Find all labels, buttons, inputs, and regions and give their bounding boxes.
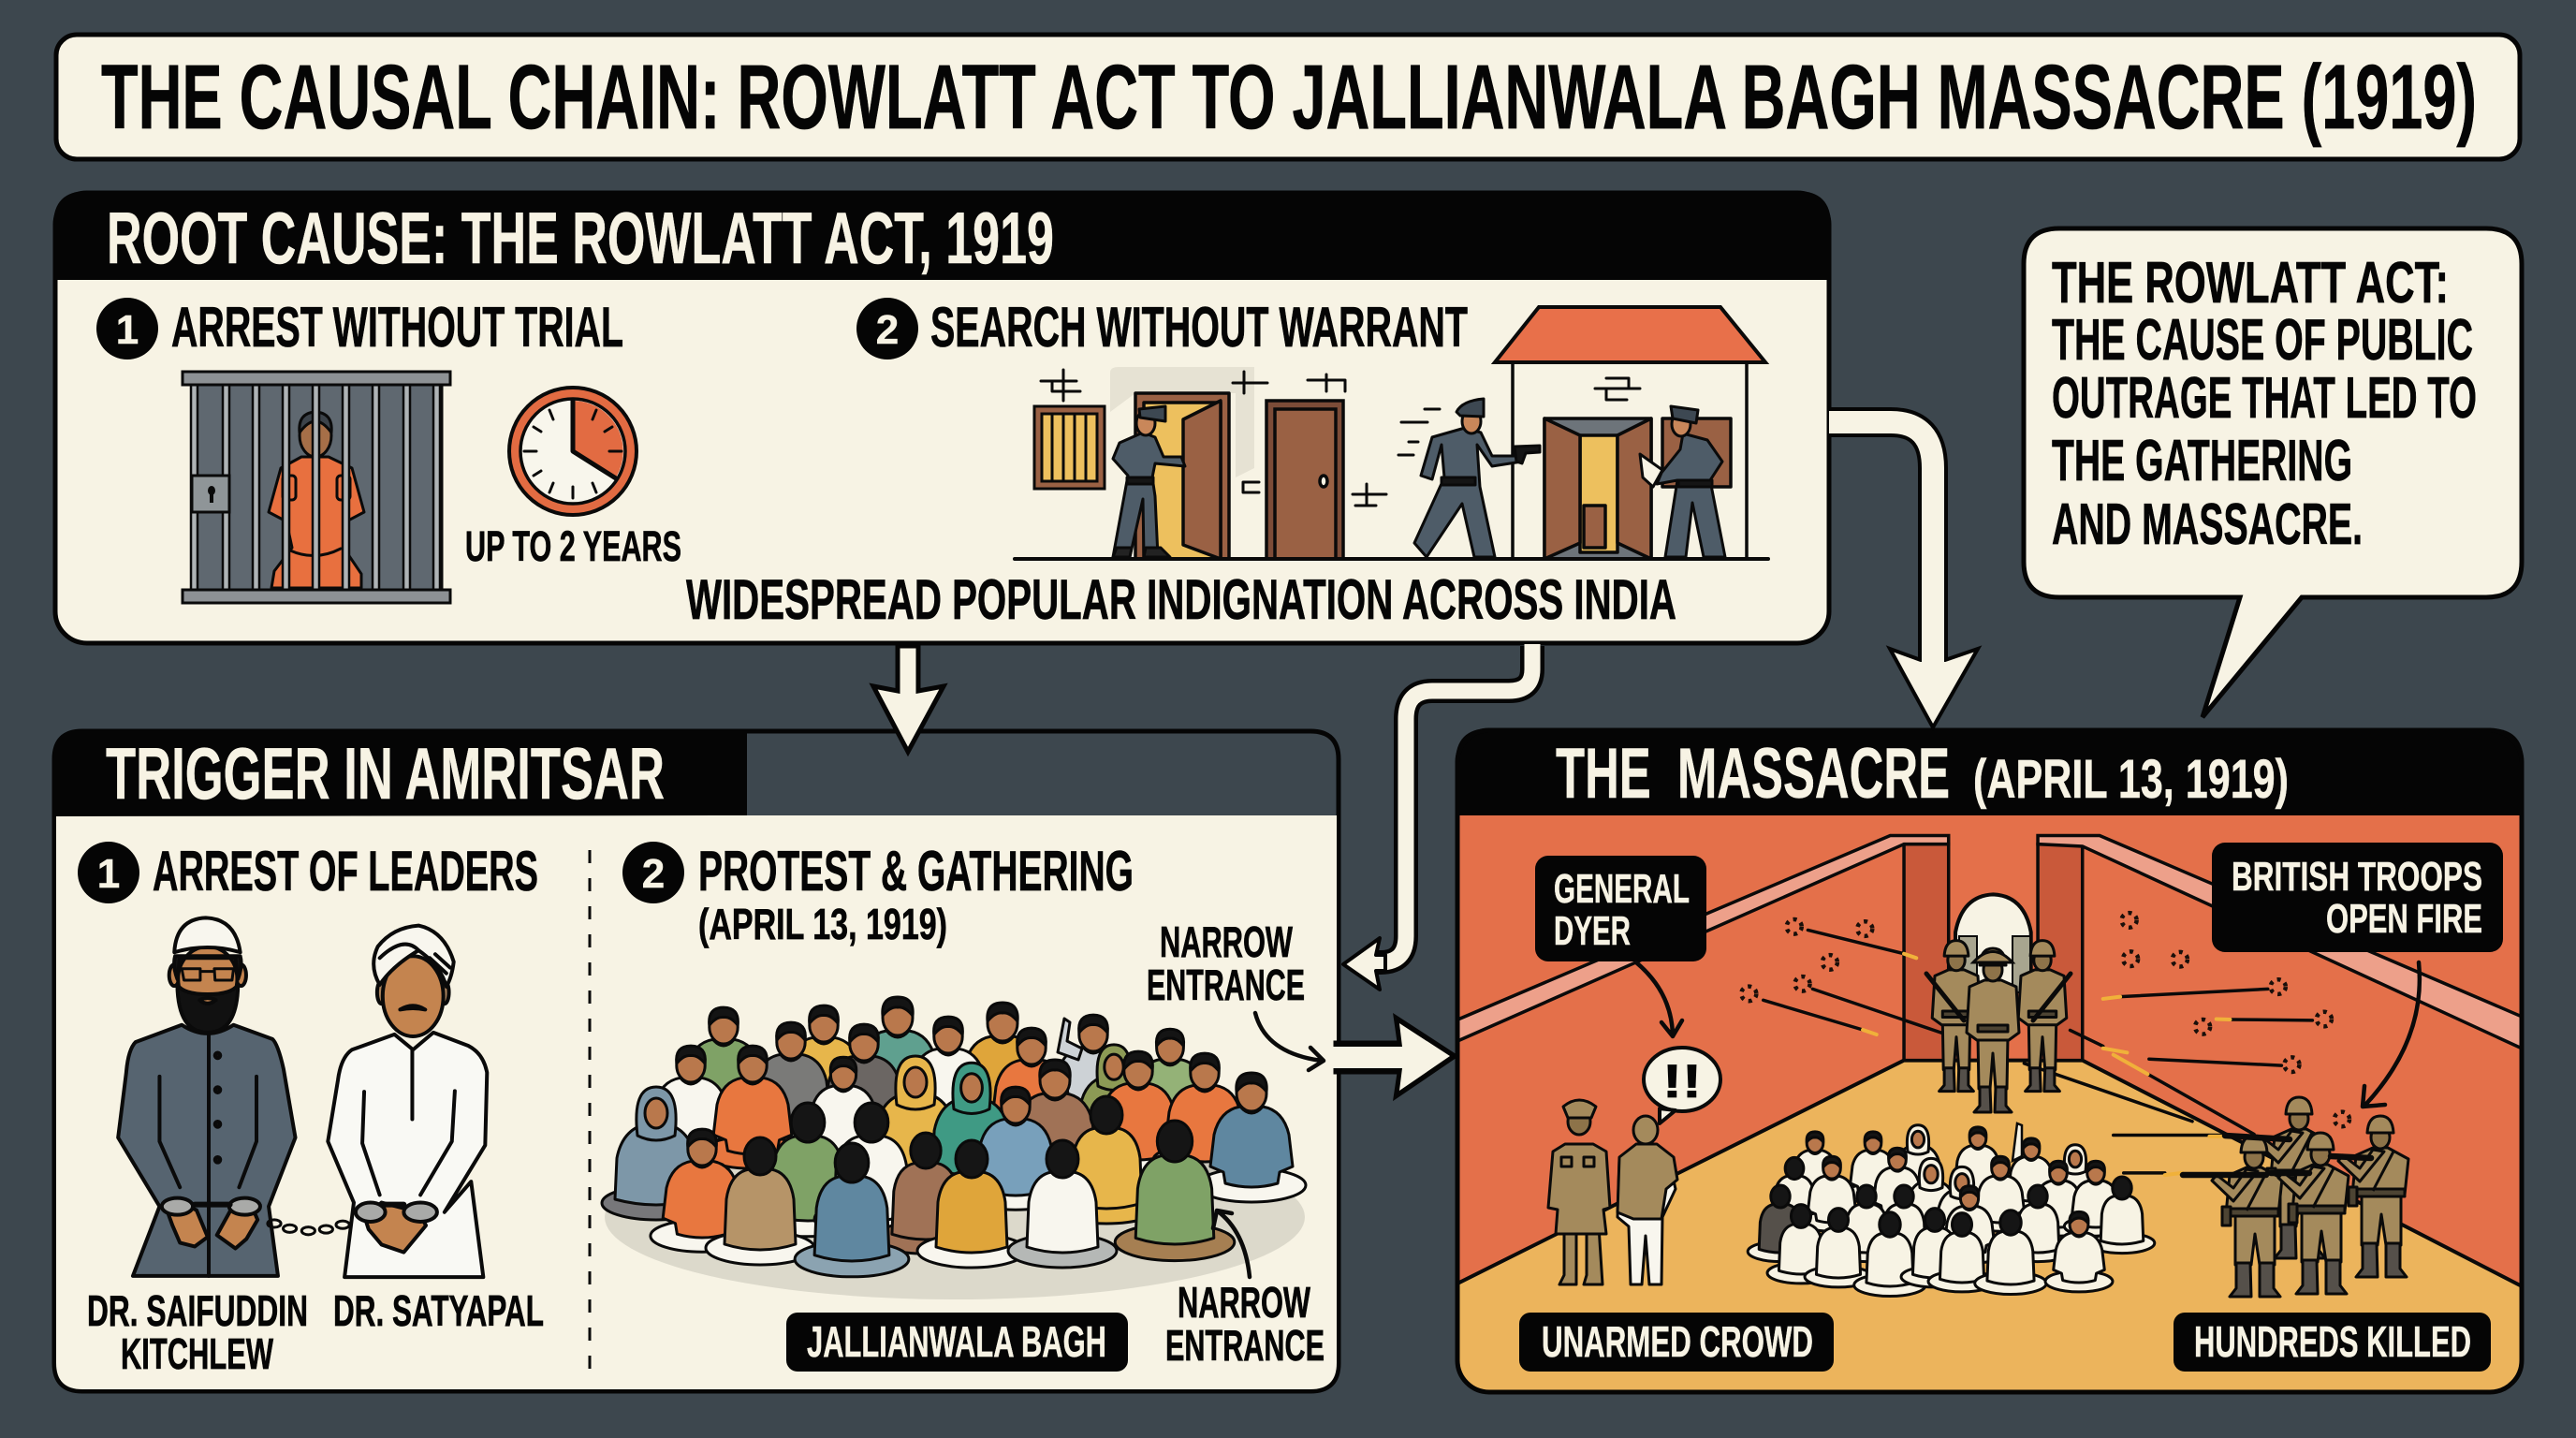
callout text: AND MASSACRE.: [2052, 492, 2363, 557]
panel: root cause: [53, 191, 1831, 643]
speech bubble with exclamations: [1644, 1048, 1720, 1123]
jallianwala bagh label: [786, 1313, 1128, 1372]
root cause header band: [53, 191, 1831, 280]
label: British troops: [2212, 843, 2503, 952]
massacre heading: THE MASSACRE: [1556, 734, 1950, 814]
number badge 1: 1: [116, 307, 139, 353]
arrow: Dyer pointer: [1636, 962, 1682, 1036]
search without warrant label: SEARCH WITHOUT WARRANT: [930, 296, 1468, 359]
police officer 3 with paper: [1640, 406, 1725, 557]
speech bubble with exclamations: !!: [1662, 1055, 1702, 1108]
door shadow: [1110, 367, 1254, 477]
leader name: Kitchlew: KITCHLEW: [121, 1329, 273, 1378]
arrow: root cause to narrow entrance: [1343, 644, 1532, 990]
barred window: [1034, 406, 1105, 489]
leader name: Kitchlew: DR. SAIFUDDIN: [87, 1286, 308, 1335]
number badge 2: 2: [876, 307, 899, 353]
house: [1495, 307, 1765, 559]
number badge 1: 1: [97, 851, 120, 897]
label: British troops: OPEN FIRE: [2326, 896, 2482, 942]
open door: [1135, 393, 1229, 559]
label: unarmed crowd: [1519, 1313, 1834, 1372]
up to 2 years label: UP TO 2 YEARS: [465, 522, 681, 570]
number badge 2: 2: [642, 851, 665, 897]
root cause heading: ROOT CAUSE: THE ROWLATT ACT, 1919: [107, 197, 1054, 279]
panel: trigger in Amritsar: [52, 729, 1339, 1391]
illustration: police search scene: [1015, 307, 1768, 559]
Dyer in tan coat: [1617, 1116, 1677, 1284]
back wall columns: [1451, 835, 2536, 1061]
title bar: [56, 35, 2520, 159]
illustration: crowd gathering: [602, 997, 1306, 1299]
ground line: [1015, 557, 1768, 561]
officer in peaked cap: [1548, 1100, 1610, 1284]
callout text: THE GATHERING: [2052, 429, 2352, 493]
firing squad: [2183, 1097, 2408, 1297]
trigger panel body: [56, 815, 1337, 1389]
trigger header tab: [52, 729, 747, 816]
arrest of leaders label: ARREST OF LEADERS: [153, 840, 538, 902]
label: General Dyer: DYER: [1554, 908, 1631, 954]
narrow entrance label top: [1147, 917, 1305, 1009]
arrow: troops pointer: [2363, 962, 2420, 1107]
gateway arch: [1955, 894, 2031, 988]
label: hundreds killed: [2174, 1313, 2491, 1372]
closed door: [1266, 401, 1343, 559]
raised arm: [1058, 1019, 1082, 1060]
leader name: Satyapal: DR. SATYAPAL: [333, 1286, 544, 1335]
grey figures beyond gate: [1959, 936, 2030, 992]
center soldiers at gate: [1926, 941, 2071, 1112]
massacre header band: [1456, 728, 2524, 815]
protest and gathering label: PROTEST & GATHERING: [698, 840, 1134, 902]
cell bars: [191, 384, 440, 590]
date: (APRIL 13, 1919): [698, 900, 947, 948]
General Dyer and officer: [1548, 1100, 1677, 1284]
callout: rowlatt act note: [2024, 228, 2522, 717]
prisoner: [269, 412, 364, 588]
illustration: handcuffed leaders: [118, 917, 487, 1277]
label: General Dyer: GENERAL: [1554, 866, 1690, 912]
label: unarmed crowd: UNARMED CROWD: [1542, 1317, 1813, 1366]
label: British troops: BRITISH TROOPS: [2232, 854, 2482, 900]
widespread indignation text: WIDESPREAD POPULAR INDIGNATION ACROSS INDIA: [686, 568, 1676, 631]
bullet holes: [1741, 913, 2349, 1126]
arrow: root cause to trigger: [873, 646, 944, 752]
arrow: narrow entrance top: [1255, 1013, 1324, 1070]
jallianwala bagh label: JALLIANWALA BAGH: [807, 1317, 1106, 1366]
narrow entrance label top: NARROW: [1160, 917, 1293, 966]
arrow: root cause to massacre: [1829, 422, 1978, 727]
muzzle flashes: [1863, 954, 2230, 1175]
narrow entrance label bottom: [1165, 1278, 1325, 1370]
chain: [268, 1220, 349, 1235]
massacre heading: (APRIL 13, 1919): [1973, 749, 2289, 810]
label: General Dyer: [1535, 856, 1706, 961]
number badge 2: [622, 842, 684, 903]
scene: courtyard: [1451, 835, 2536, 1401]
number badge 1: [96, 298, 158, 360]
icon: clock: [509, 388, 637, 515]
arrest without trial label: ARREST WITHOUT TRIAL: [171, 296, 623, 359]
lock: [192, 476, 229, 512]
Dr Kitchlew figure: [118, 917, 296, 1276]
police officer 1: [1113, 406, 1185, 557]
narrow entrance label bottom: ENTRANCE: [1165, 1321, 1325, 1370]
unarmed crowd figures: [1748, 1123, 2155, 1297]
floor: [1451, 1061, 2536, 1401]
narrow entrance label bottom: NARROW: [1178, 1278, 1310, 1327]
icon: jail cell with prisoner: [183, 372, 450, 603]
police officer 2 with pistol: [1398, 399, 1540, 557]
tracer lines: [1764, 930, 2312, 1173]
trigger heading: TRIGGER IN AMRITSAR: [106, 732, 665, 814]
arrow: narrow entrance bottom: [1213, 1211, 1250, 1277]
panel: the massacre: [1451, 728, 2536, 1401]
double door: [1544, 418, 1731, 559]
panel outline: [1457, 730, 2522, 1392]
decorative marks: [1041, 370, 1640, 506]
number badge 2: [856, 298, 918, 360]
callout text: [2052, 251, 2477, 557]
arrow: trigger to massacre: [1333, 1016, 1456, 1098]
narrow entrance label top: ENTRANCE: [1147, 961, 1305, 1009]
leader name: Kitchlew: [87, 1286, 308, 1378]
Dr Satyapal figure: [328, 926, 487, 1277]
number badge 1: [78, 842, 139, 903]
